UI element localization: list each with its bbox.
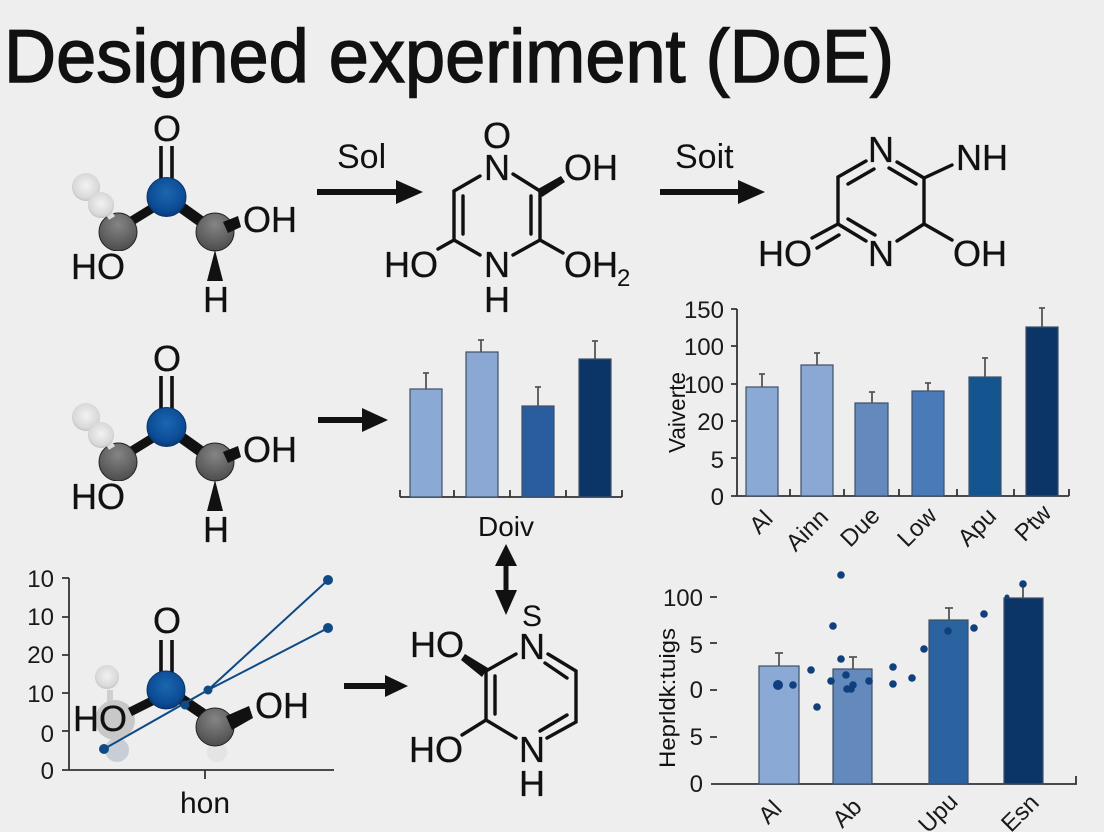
x axis labels: Apu [953, 503, 1002, 552]
y axis labels: 5 [690, 632, 703, 659]
molecule: ball-and-stick middle left: O [153, 338, 181, 379]
x axis labels: Due [835, 502, 885, 552]
y axis labels: 20 [27, 642, 54, 669]
bar chart: top right [664, 297, 1069, 557]
molecule: ring top centre: 2 [617, 265, 630, 292]
molecule: ring top centre: HO [384, 244, 438, 285]
y axis labels: 10 [27, 604, 54, 631]
x axis labels: Al [744, 505, 778, 539]
molecule: ring top right: HO [758, 233, 812, 274]
y axis labels: 10 [27, 681, 54, 708]
molecule: ball-and-stick middle left [70, 338, 297, 550]
molecule: ring top right: N [868, 129, 894, 170]
x axis labels [753, 788, 1045, 832]
x axis and ticks [710, 597, 1076, 784]
y axis and ticks [731, 309, 1069, 496]
y axis labels: 10 [27, 566, 54, 593]
overlaid molecule: O [153, 600, 181, 641]
molecule: ball-and-stick middle left: OH [243, 429, 297, 470]
arrow with label: Sol [317, 138, 423, 204]
y axis labels [684, 297, 724, 511]
arrow: bottom row [344, 675, 408, 697]
molecule: ball-and-stick top left: H [203, 279, 229, 320]
data lines [99, 575, 333, 754]
y axis title: Heprldk:tuigs [655, 628, 680, 768]
y axis labels: 0 [41, 758, 54, 785]
x axis labels: Al [753, 795, 787, 829]
y axis labels: 100 [663, 585, 703, 612]
molecule: ring bottom centre [409, 600, 576, 804]
y axis labels [27, 566, 54, 785]
bar chart: centre [400, 340, 622, 497]
molecule: ball-and-stick top left: OH [243, 199, 297, 240]
molecule: ball-and-stick middle left: H [203, 509, 229, 550]
label: Doiv: Doiv [478, 511, 534, 542]
x axis labels [744, 499, 1058, 557]
molecule: ball-and-stick top left [70, 108, 297, 320]
molecule: ring top centre: OH [564, 147, 618, 188]
y axis labels: 150 [684, 297, 724, 324]
molecule: ball-and-stick middle left: HO [71, 476, 125, 517]
molecule: ring bottom centre: S [522, 600, 542, 633]
y axis labels: 0 [690, 771, 703, 798]
overlaid molecule: HO [73, 698, 127, 739]
molecule: ring top centre: OH [564, 244, 618, 285]
y axis labels: 100 [684, 334, 724, 361]
x axis labels: Ptw [1010, 499, 1058, 547]
y axis labels: 20 [697, 409, 724, 436]
bar and dot chart: bottom right [655, 571, 1076, 832]
molecule: ring top centre [384, 115, 630, 320]
arrow: middle row [318, 408, 388, 432]
molecule: ring top centre: H [484, 279, 510, 320]
overlaid molecule [73, 600, 309, 762]
molecule: ring bottom centre: H [519, 763, 545, 804]
molecule: ring top centre: O [483, 115, 511, 156]
line chart with molecule overlay: bottom left [27, 566, 334, 820]
y axis labels: 0 [711, 484, 724, 511]
double arrow [495, 544, 517, 615]
molecule: ring top right: NH [956, 137, 1008, 178]
y axis labels: 100 [684, 372, 724, 399]
y axis labels: 0 [41, 721, 54, 748]
molecule: ring bottom centre: N [519, 729, 545, 770]
axes [62, 578, 334, 779]
molecule: ring top right [758, 129, 1008, 274]
x axis label: hon [180, 787, 230, 820]
molecule: ring bottom centre: HO [409, 729, 463, 770]
molecule: ring top right: N [868, 233, 894, 274]
molecule: ring top centre: N [484, 147, 510, 188]
y axis labels: 5 [690, 724, 703, 751]
scatter dots [773, 571, 1027, 711]
title: Designed experiment (DoE) [4, 14, 894, 98]
molecule: ball-and-stick top left: O [153, 108, 181, 149]
y axis labels: 5 [711, 447, 724, 474]
y axis labels [663, 585, 703, 798]
molecule: ball-and-stick top left: HO [71, 246, 125, 287]
bars [746, 308, 1058, 496]
molecule: ring top centre: N [484, 244, 510, 285]
arrow with label: Soit: Soit [675, 138, 734, 176]
x axis labels: Ainn [781, 504, 834, 557]
bars [759, 584, 1043, 784]
molecule: ring bottom centre: N [519, 626, 545, 667]
y axis title: Vaiverte [664, 372, 690, 453]
arrow with label: Sol: Sol [337, 138, 386, 176]
overlaid molecule: OH [255, 685, 309, 726]
molecule: ring top right: OH [953, 233, 1007, 274]
molecule: ring bottom centre: HO [410, 624, 464, 665]
y axis labels: 0 [690, 677, 703, 704]
x axis labels: Low [892, 502, 943, 552]
arrow with label: Soit [660, 138, 765, 204]
